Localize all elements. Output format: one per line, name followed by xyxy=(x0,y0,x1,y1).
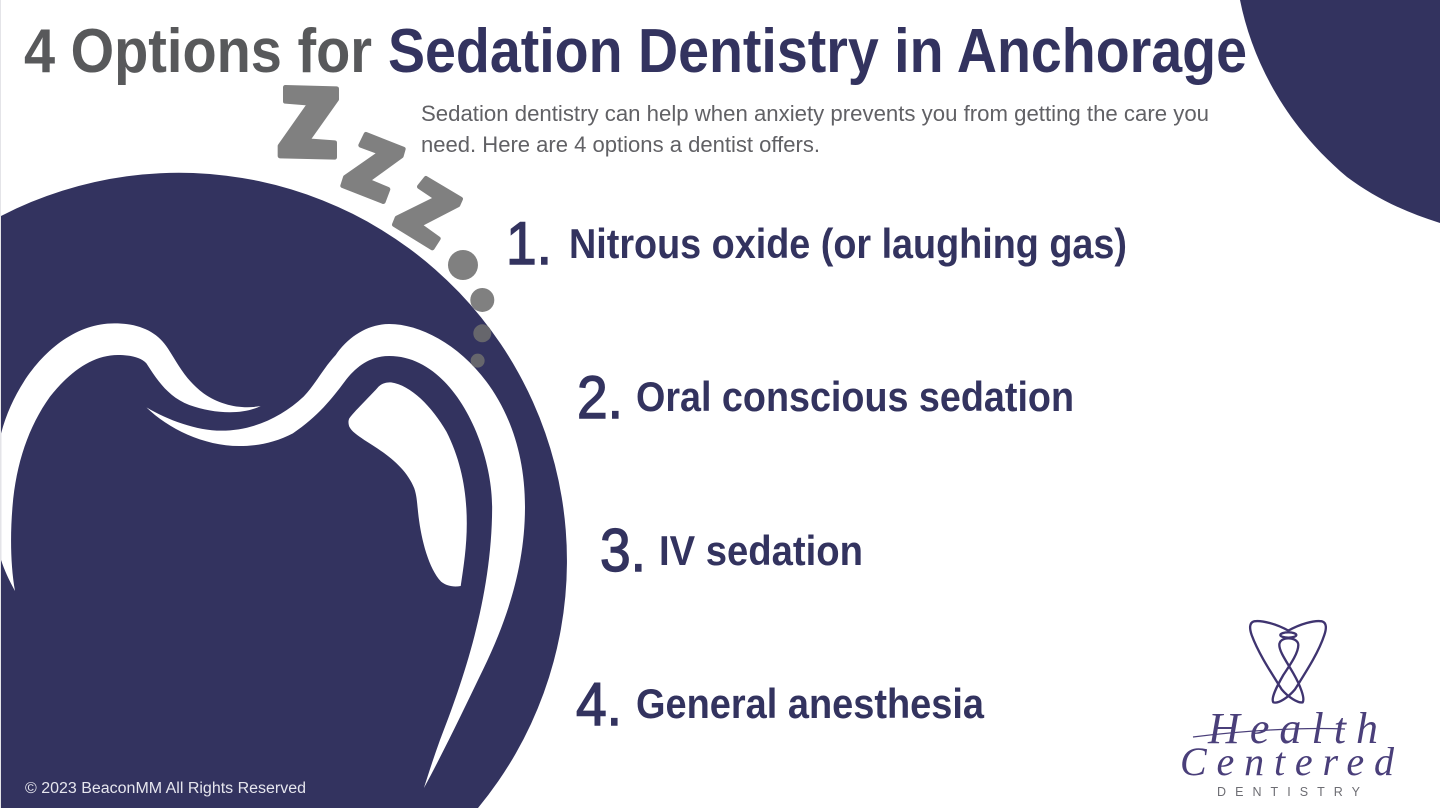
icon: white tooth outline xyxy=(1,323,525,788)
list item 2: 2. xyxy=(577,364,623,431)
icon: sleeping Zzz with dots xyxy=(280,87,494,368)
list item 4: 4. xyxy=(576,671,622,738)
list item 3 xyxy=(600,517,863,584)
list item 3: IV sedation xyxy=(659,527,863,574)
logo script: Health: Health xyxy=(1207,704,1378,753)
copyright: © 2023 BeaconMM All Rights Reserved xyxy=(25,780,306,797)
title: Sedation Dentistry in Anchorage xyxy=(388,17,1247,86)
list item 4 xyxy=(576,671,985,738)
intro text: need. Here are 4 options a dentist offers. xyxy=(421,132,820,157)
logo: Health Centered Dentistry xyxy=(1180,621,1395,799)
icon: large Z xyxy=(280,87,337,157)
icon: logo tooth xyxy=(1250,621,1326,703)
list item 1: Nitrous oxide (or laughing gas) xyxy=(569,220,1127,267)
icon: small Z xyxy=(394,178,461,248)
icon: dots xyxy=(448,250,494,368)
list item 1: 1. xyxy=(506,210,552,277)
intro text: Sedation dentistry can help when anxiety prevents you from getting the care you xyxy=(421,101,1209,126)
logo wordmark: Dentistry: DENTISTRY xyxy=(1217,785,1361,799)
list item 4: General anesthesia xyxy=(636,680,985,727)
title: 4 Options for xyxy=(24,17,372,86)
list item 2 xyxy=(577,364,1074,431)
list item 1 xyxy=(506,210,1127,277)
list item 2: Oral conscious sedation xyxy=(636,373,1074,420)
logo script: Centered: Centered xyxy=(1180,739,1395,784)
corner shape: top right navy circle xyxy=(1240,0,1440,223)
icon: medium Z xyxy=(343,134,403,202)
list item 3: 3. xyxy=(600,517,646,584)
navy circle xyxy=(1,173,567,808)
panel: navy circle with tooth xyxy=(1,173,567,808)
